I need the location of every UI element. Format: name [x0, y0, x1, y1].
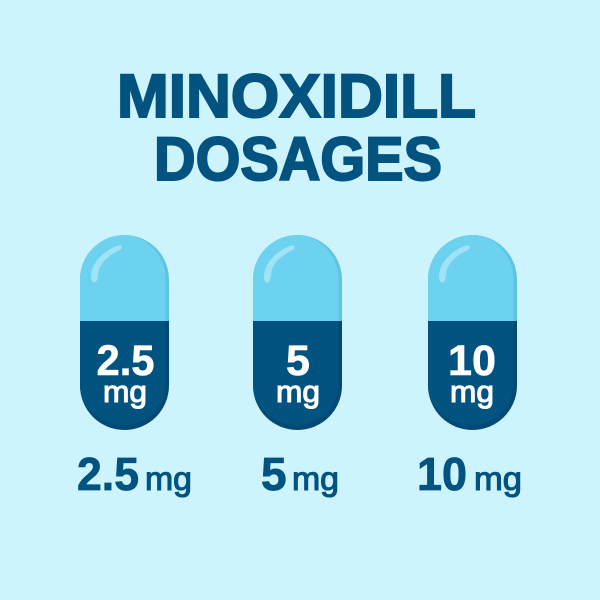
capsule: 10 mg: [428, 235, 517, 430]
capsule: 2.5 mg: 2.5: [96, 337, 154, 385]
capsule: 5 mg: [253, 235, 342, 430]
label: 5 mg: mg: [292, 460, 339, 497]
label: 10 mg: mg: [474, 460, 522, 497]
capsule: 5 mg: mg: [276, 374, 320, 409]
label: 5 mg: [261, 448, 339, 500]
label: 10 mg: [417, 448, 522, 500]
label: 10 mg: 10: [417, 448, 467, 500]
title: DOSAGES: [154, 125, 442, 193]
capsule: 2.5 mg: [80, 235, 169, 430]
capsule: 10 mg: 10: [448, 337, 496, 385]
title: [117, 62, 476, 193]
label: 2.5 mg: 2.5: [77, 448, 139, 500]
capsule: 2.5 mg: mg: [103, 374, 147, 409]
title: MINOXIDILL: [117, 62, 476, 130]
capsule: 10 mg: mg: [450, 374, 494, 409]
label: 2.5 mg: mg: [145, 460, 192, 497]
capsule: 5 mg: 5: [286, 337, 310, 385]
label: 2.5 mg: [77, 448, 192, 500]
label: 5 mg: 5: [261, 448, 287, 500]
